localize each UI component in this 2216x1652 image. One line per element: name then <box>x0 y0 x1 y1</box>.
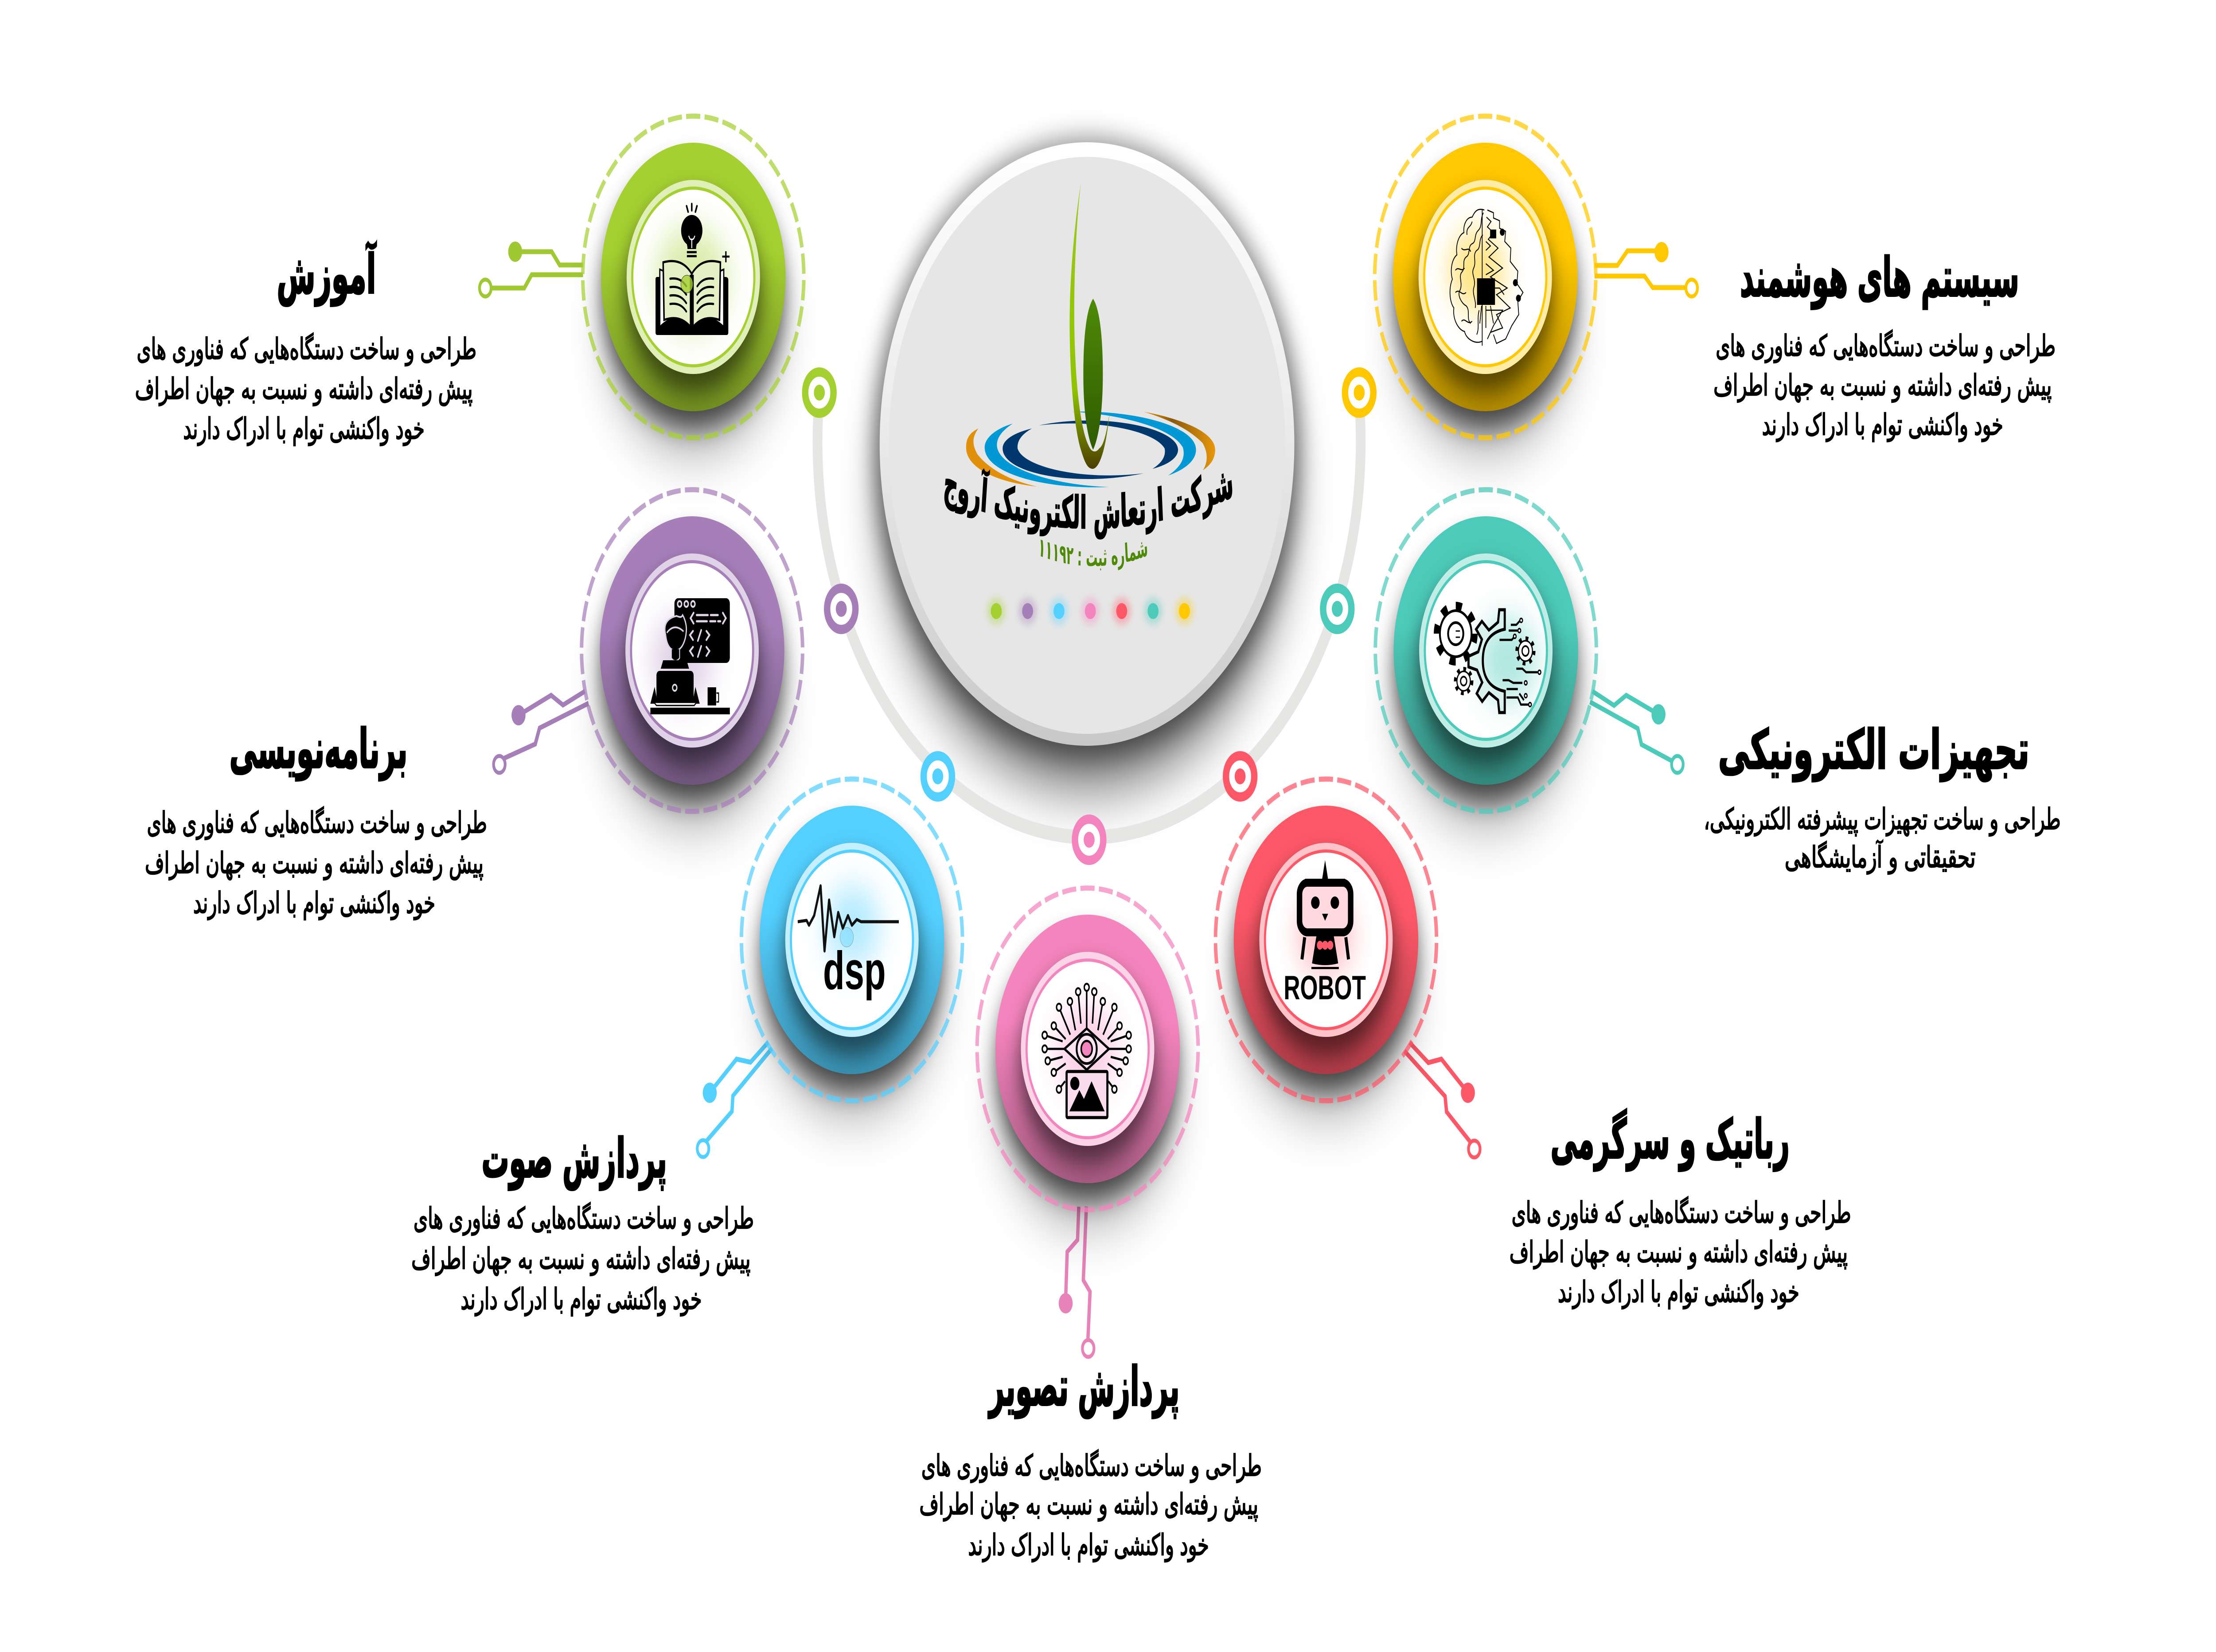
panel: central logo shadow <box>874 137 1300 788</box>
panel: programming badge <box>494 490 803 822</box>
text block: robotics: خود واکنشی توام با ادراک دارند <box>1558 1275 1799 1309</box>
text block: robotics <box>1510 1196 1851 1309</box>
text block: electronic equipment: تحقیقاتی و آزمایشگاهی <box>1785 840 1976 874</box>
heading: smart systems: سیستم های هوشمند <box>1740 246 2019 309</box>
connector <box>1405 1043 1480 1157</box>
connector <box>480 242 583 296</box>
connecting arc <box>818 393 1361 838</box>
heading: programming: برنامه‌نویسی <box>230 717 408 781</box>
text block: image processing <box>919 1449 1262 1562</box>
icon: dsp waveform: dsp <box>823 940 886 1001</box>
text block: smart systems: پیش رفته‌ای داشته و نسبت به جهان اطراف <box>1713 368 2052 402</box>
bullseye markers on arc <box>805 372 1373 861</box>
text block: education: پیش رفته‌ای داشته و نسبت به جهان اطراف <box>135 372 473 406</box>
text block: electronic equipment: طراحی و ساخت تجهیزات پیشرفته الکترونیکی، <box>1704 802 2061 836</box>
text block: smart systems: طراحی و ساخت دستگاه‌هایی که فناوری های <box>1716 329 2056 363</box>
text block: programming <box>145 806 487 920</box>
text block: audio processing <box>411 1201 754 1316</box>
text block: audio processing: پیش رفته‌ای داشته و نسبت به جهان اطراف <box>411 1242 750 1276</box>
company name: شرکت ارتعاش الکترونیک آروج <box>942 456 1235 539</box>
text block: education: خود واکنشی توام با ادراک دارند <box>183 412 425 446</box>
disc face <box>889 157 1285 734</box>
connector <box>697 1042 772 1157</box>
heading: image processing: پردازش تصویر <box>988 1355 1179 1418</box>
text block: audio processing: طراحی و ساخت دستگاه‌هایی که فناوری های <box>414 1201 754 1235</box>
panel: education badge <box>480 116 804 448</box>
connector <box>1590 691 1683 773</box>
text block: programming: طراحی و ساخت دستگاه‌هایی که فناوری های <box>147 806 487 840</box>
text block: education <box>135 332 476 446</box>
panel: smart systems badge <box>1375 116 1697 448</box>
text block: electronic equipment <box>1704 802 2061 874</box>
text block: image processing: پیش رفته‌ای داشته و نسبت به جهان اطراف <box>919 1487 1258 1521</box>
text block: audio processing: خود واکنشی توام با ادراک دارند <box>460 1282 702 1316</box>
text block: programming: خود واکنشی توام با ادراک دارند <box>193 886 435 920</box>
icon: brain with chip <box>1449 209 1523 346</box>
heading: audio processing: پردازش صوت <box>481 1127 667 1190</box>
registration number <box>1013 531 1174 573</box>
panel: image processing badge <box>977 888 1198 1357</box>
panel: robotics badge <box>1216 779 1480 1157</box>
connector <box>1059 1207 1094 1357</box>
text block: programming: پیش رفته‌ای داشته و نسبت به جهان اطراف <box>145 846 484 880</box>
heading: robotics: رباتیک و سرگرمی <box>1551 1108 1790 1171</box>
colour dots row <box>987 597 1194 625</box>
text block: education: طراحی و ساخت دستگاه‌هایی که فناوری های <box>137 332 476 366</box>
icon: gears and circuits <box>1437 606 1541 713</box>
text block: image processing: خود واکنشی توام با ادراک دارند <box>968 1528 1209 1562</box>
heading: electronic equipment: تجهیزات الکترونیکی <box>1718 718 2029 782</box>
icon: robot <box>1284 860 1366 1006</box>
connector <box>1595 242 1697 296</box>
text block: image processing: طراحی و ساخت دستگاه‌هایی که فناوری های <box>921 1449 1262 1483</box>
registration number: شماره ثبت : ۱۱۱۹۲ <box>1038 531 1149 573</box>
icon: programmer at laptop <box>650 598 730 714</box>
text block: robotics: پیش رفته‌ای داشته و نسبت به جهان اطراف <box>1510 1235 1848 1269</box>
panel: central logo disc <box>880 142 1294 746</box>
connector <box>494 691 589 773</box>
text block: smart systems: خود واکنشی توام با ادراک دارند <box>1762 408 2003 442</box>
panel: audio processing badge <box>697 779 963 1157</box>
text block: smart systems <box>1713 329 2056 442</box>
icon: book and lightbulb <box>655 204 730 335</box>
icon: eye with circuit rays and picture <box>1045 987 1129 1118</box>
panel: electronic equipment badge <box>1375 490 1683 822</box>
icon: robot: ROBOT <box>1284 969 1366 1006</box>
logo mark <box>966 183 1215 487</box>
disc outer ring <box>880 142 1294 746</box>
heading: education: آموزش <box>277 241 377 306</box>
icon: dsp waveform <box>798 886 899 1001</box>
text block: robotics: طراحی و ساخت دستگاه‌هایی که فناوری های <box>1512 1196 1851 1230</box>
